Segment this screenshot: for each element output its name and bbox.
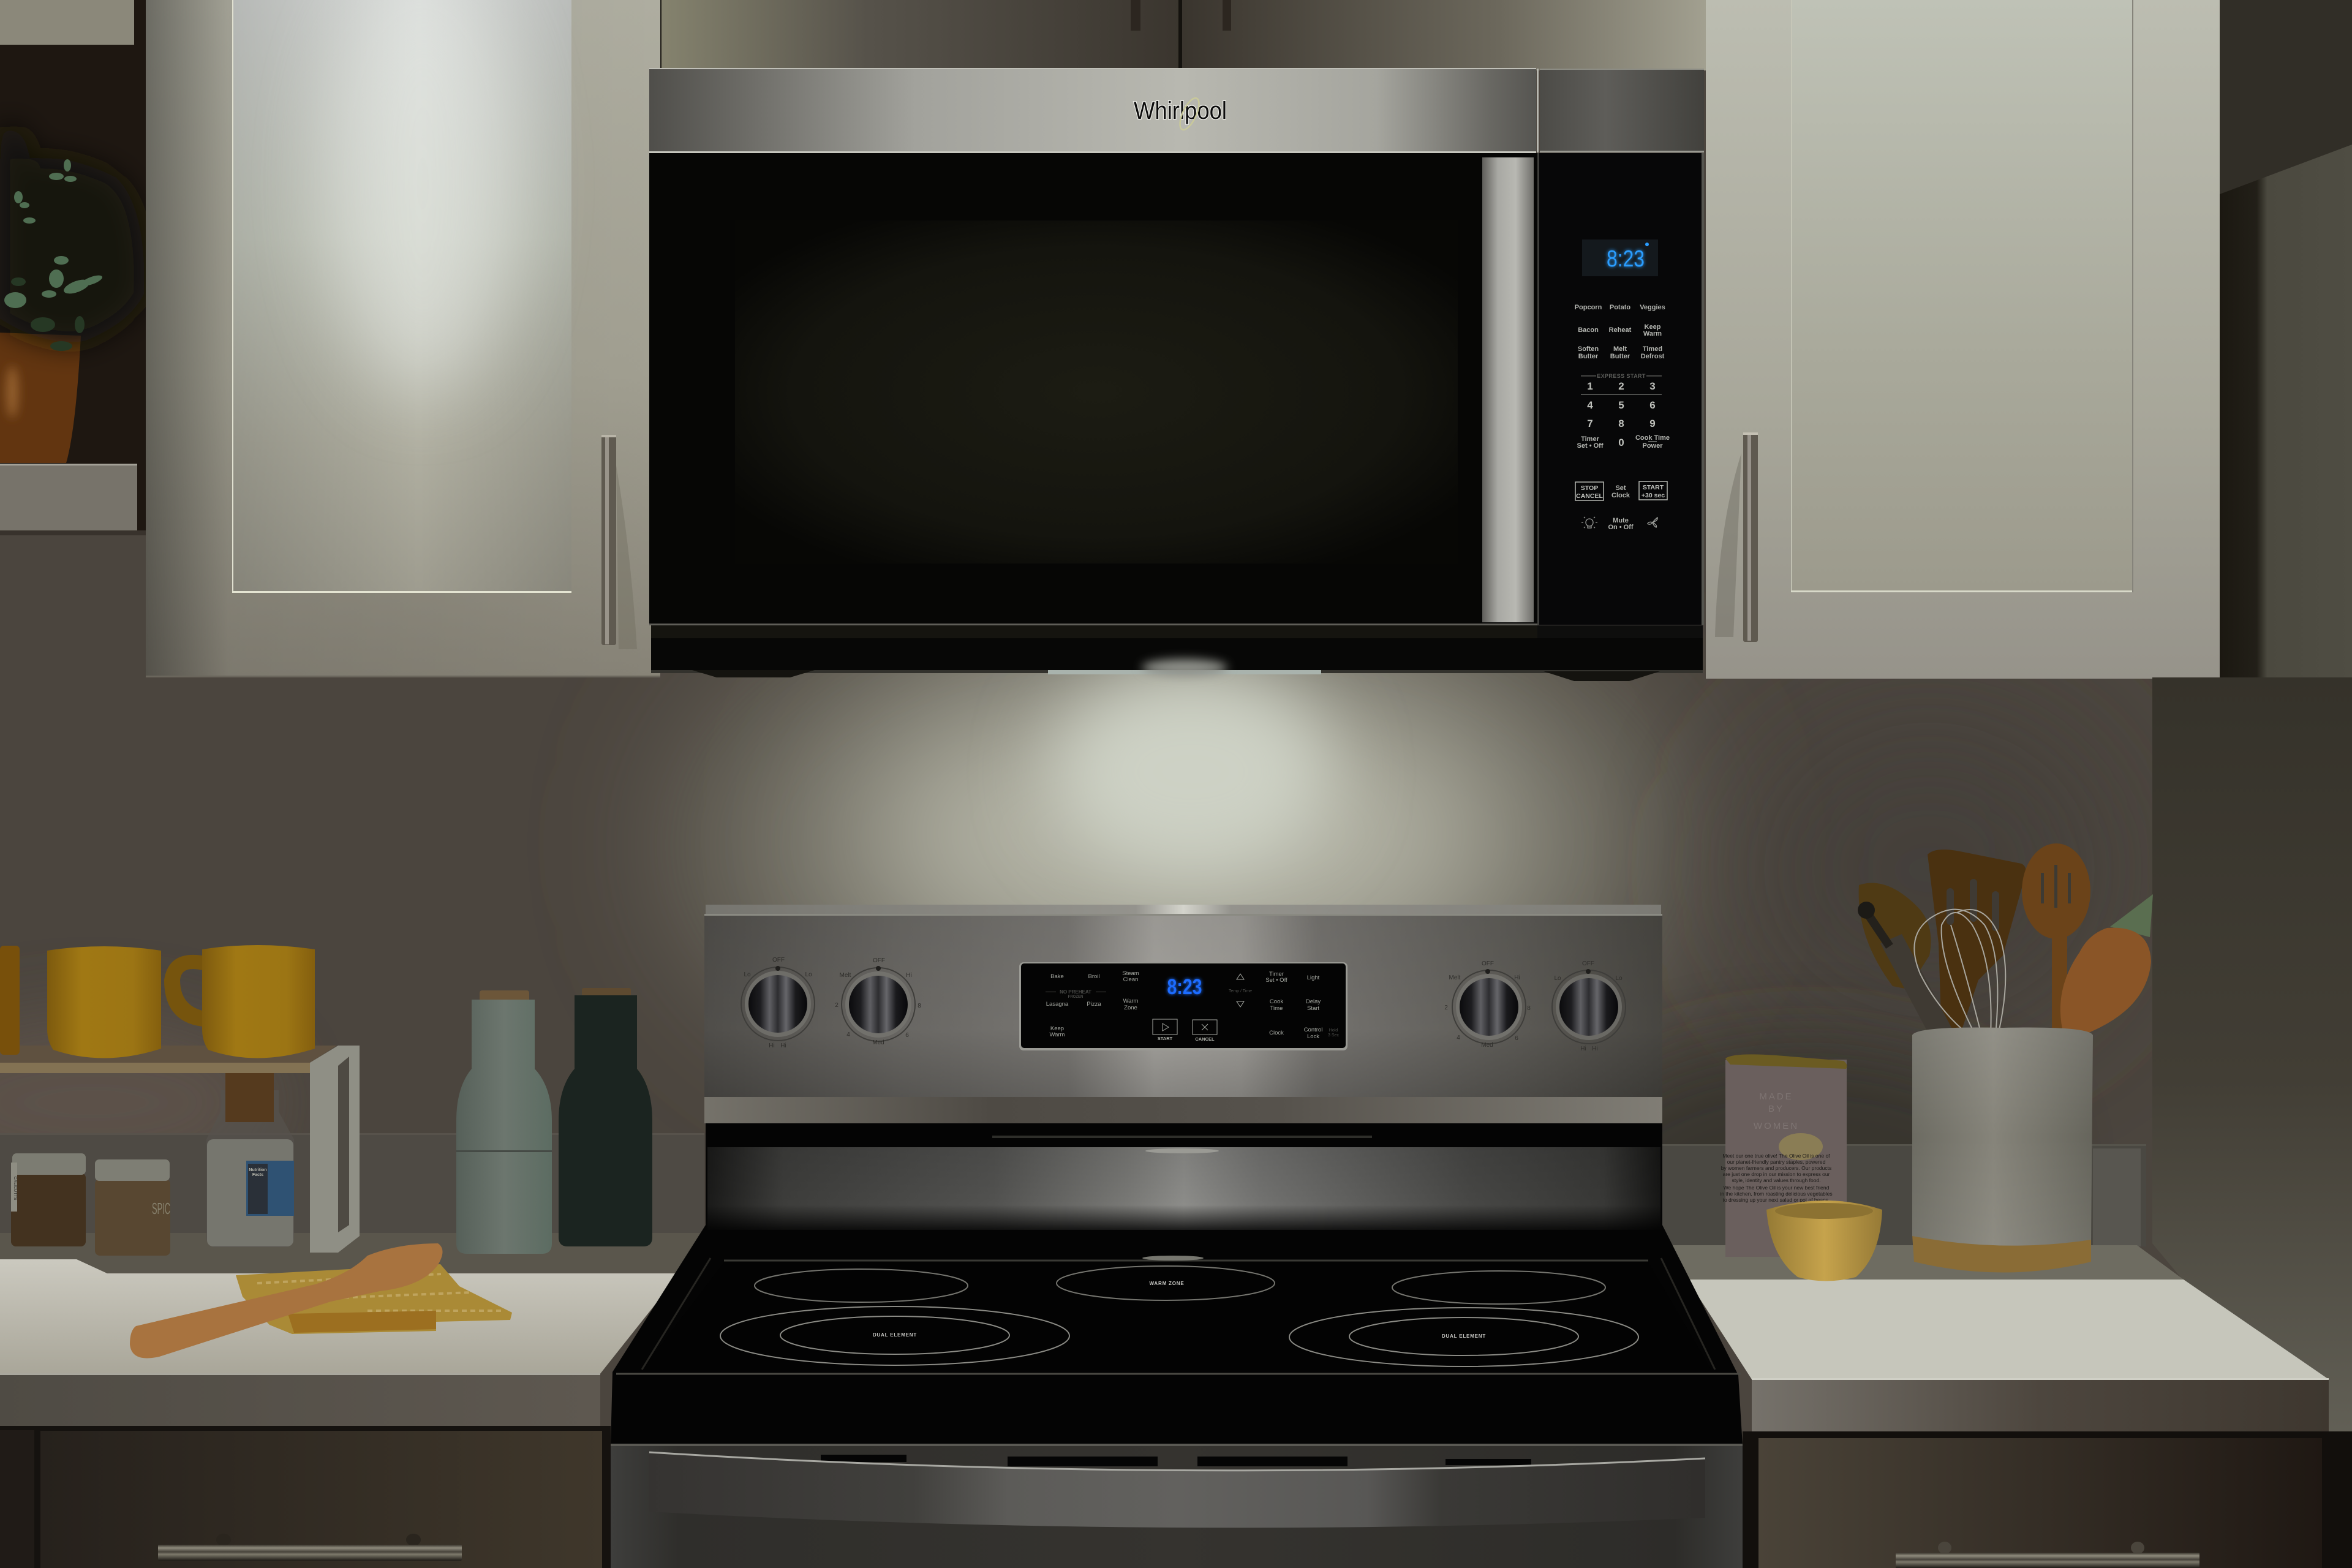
- mug left partial: [0, 946, 20, 1055]
- number keys: 4: [1587, 399, 1593, 411]
- right keys: Lock: [1307, 1033, 1319, 1040]
- left knob: Hi: [780, 1042, 786, 1049]
- slotted spoon: [2022, 843, 2090, 1038]
- right bracket: [1544, 671, 1660, 681]
- cooktop glass: [616, 1256, 1741, 1374]
- third knob: Hi: [1514, 974, 1520, 981]
- mute key: Mute: [1613, 517, 1629, 524]
- right keys: Cook: [1270, 998, 1283, 1005]
- third knob: 8: [1527, 1005, 1531, 1012]
- lit leaves: [4, 159, 104, 308]
- second knob: Hi: [906, 972, 912, 979]
- burner front left: [720, 1306, 1069, 1365]
- third knob: 4: [1457, 1035, 1460, 1041]
- door handle: [1482, 157, 1534, 622]
- number keys: 6: [1649, 399, 1656, 411]
- left knob: [741, 957, 815, 1049]
- left keys: Keep: [1050, 1025, 1064, 1032]
- stop cancel key: CANCEL: [1576, 492, 1603, 500]
- left keys: [1046, 970, 1139, 1038]
- range body and cooktop surround: [611, 1123, 1743, 1446]
- right upper cabinet door: [1706, 0, 2220, 679]
- preset keys: Bacon: [1578, 326, 1599, 334]
- number keys: [1587, 380, 1656, 448]
- mug centre: [47, 946, 161, 1058]
- stop cancel key: [1575, 482, 1604, 500]
- no preheat label: FROZEN: [1068, 995, 1083, 999]
- potted plant: [0, 126, 144, 463]
- door vents: [821, 1455, 1531, 1466]
- second knob: OFF: [873, 957, 885, 964]
- terracotta pot: [0, 333, 81, 463]
- clock display: 8:23: [1607, 246, 1645, 272]
- number keys: 8: [1618, 418, 1624, 429]
- yellow cup: [1766, 1200, 1882, 1281]
- clock display: [1582, 239, 1658, 276]
- large spoon: [2060, 928, 2151, 1036]
- burner back left: [755, 1269, 968, 1302]
- preset keys: Soften: [1578, 345, 1599, 353]
- right keys: Timer: [1269, 971, 1284, 978]
- preset keys: Potato: [1610, 304, 1630, 311]
- left keys: Clean: [1123, 976, 1138, 983]
- timer and cook time keys: Cook Time: [1635, 434, 1670, 442]
- handle shadow: [1715, 453, 1741, 637]
- grinder pale: [456, 990, 552, 1254]
- cabinet handles: [1131, 0, 1140, 31]
- wooden riser shelf: [0, 1046, 337, 1073]
- oven door: [611, 1444, 1743, 1568]
- right keys: Start: [1307, 1005, 1319, 1012]
- left counter props: [0, 945, 652, 1359]
- right keys: Delay: [1306, 998, 1321, 1005]
- right knob: OFF: [1582, 960, 1594, 967]
- preset keys: Melt: [1613, 345, 1627, 353]
- right keys: Control: [1304, 1027, 1322, 1033]
- tin copy: are just one drop in our mission to express our: [1723, 1171, 1830, 1177]
- tin copy: We hope The Olive Oil is your new best friend: [1724, 1185, 1830, 1191]
- right knob: Lo: [1554, 975, 1561, 982]
- second knob: 6: [905, 1032, 909, 1039]
- right keys: [1265, 971, 1322, 1040]
- left counter props: SPIC: [152, 1199, 170, 1218]
- third knob: [1444, 960, 1531, 1049]
- timer and cook time keys: Power: [1642, 442, 1663, 450]
- right keys: Clock: [1269, 1030, 1284, 1036]
- burner front left: DUAL ELEMENT: [873, 1332, 917, 1338]
- timer and cook time keys: [1577, 434, 1670, 450]
- wooden spatula: [1928, 850, 2026, 1035]
- wire whisk: [1914, 910, 2005, 1035]
- tin copy: Meet our one true olive! The Olive Oil is one of: [1722, 1153, 1830, 1159]
- white utensil crock: [1912, 1028, 2093, 1273]
- stainless top band: [649, 68, 1536, 153]
- tin copy: our planet-friendly pantry staples, powered: [1727, 1159, 1826, 1165]
- express start label: EXPRESS START: [1597, 373, 1646, 379]
- control panel: [1537, 153, 1704, 625]
- icon: light bulb: [1581, 517, 1597, 528]
- left upper cabinet door: [146, 0, 660, 677]
- door bottom trim: [649, 624, 1703, 638]
- left knob: Lo: [744, 971, 751, 978]
- electric range: [611, 905, 1743, 1568]
- green spatula tip: [2110, 894, 2153, 937]
- door glass: [649, 153, 1537, 625]
- cabinet handle: [1743, 432, 1758, 642]
- preset keys: Warm: [1643, 330, 1662, 337]
- express start label: [1581, 373, 1662, 394]
- tin seal: [1779, 1133, 1823, 1160]
- second knob: [835, 957, 921, 1046]
- nutrition label: Facts: [252, 1173, 263, 1177]
- second knob: 2: [835, 1002, 839, 1009]
- start button: [1153, 1019, 1177, 1041]
- preset keys: Reheat: [1609, 326, 1632, 334]
- left keys: Broil: [1088, 973, 1100, 980]
- tin copy: by women farmers and producers. Our products: [1721, 1165, 1831, 1171]
- left knob: Lo: [805, 971, 812, 978]
- recessed panel: [1791, 0, 2133, 592]
- backguard: [704, 905, 1662, 1123]
- left keys: Warm: [1050, 1031, 1065, 1038]
- second knob: 8: [918, 1003, 921, 1009]
- left knob: Hi: [769, 1042, 775, 1049]
- cancel button: CANCEL: [1195, 1036, 1215, 1042]
- start key: [1639, 481, 1667, 500]
- third knob: Melt: [1449, 974, 1461, 981]
- nutrition label: Nutrition: [249, 1168, 267, 1172]
- cancel button: [1193, 1020, 1217, 1042]
- left keys: Lasagna: [1046, 1001, 1069, 1008]
- olive oil tin: BY: [1768, 1104, 1784, 1114]
- spice jar one: [11, 1153, 86, 1246]
- right knob: Hi: [1592, 1046, 1598, 1052]
- temp time arrows: [1229, 974, 1252, 1007]
- clock display: 8:23: [1167, 975, 1202, 999]
- second knob: Melt: [840, 972, 851, 979]
- timer and cook time keys: Set • Off: [1577, 442, 1604, 450]
- olive oil tin: MADE: [1759, 1091, 1793, 1102]
- number keys: 7: [1587, 418, 1593, 429]
- temp time arrows: Temp / Time: [1229, 989, 1252, 993]
- microwave underside: [651, 637, 1703, 681]
- brand logo: [1134, 96, 1227, 132]
- upper shelf: [0, 0, 134, 45]
- hold hint: 3 Sec: [1328, 1033, 1339, 1038]
- no preheat label: [1046, 989, 1106, 999]
- number keys: 2: [1618, 380, 1624, 392]
- grinder dark: [559, 988, 652, 1246]
- recessed panel: [232, 0, 571, 593]
- microwave: [649, 68, 1704, 681]
- glossy splash reflection: [707, 1136, 1660, 1230]
- preset keys: Keep: [1645, 323, 1661, 331]
- burner back right: [1392, 1271, 1605, 1304]
- set clock key: Clock: [1611, 492, 1630, 499]
- trim band: [704, 1097, 1662, 1123]
- fridge side upper right: [2220, 0, 2352, 680]
- start key: START: [1643, 484, 1664, 491]
- mute key: On • Off: [1608, 524, 1634, 531]
- number keys: 9: [1649, 418, 1656, 429]
- drawer front: [40, 1431, 602, 1568]
- tin copy: in the kitchen, from roasting delicious vegetables: [1720, 1191, 1833, 1197]
- left bracket: [692, 670, 815, 677]
- preset keys: Popcorn: [1575, 304, 1602, 311]
- olive oil tin: [1720, 1054, 1847, 1257]
- drawer pull: [1896, 1542, 2199, 1568]
- control display panel: [1019, 962, 1348, 1050]
- burner front right: DUAL ELEMENT: [1442, 1333, 1486, 1339]
- drawer front: [1758, 1438, 2322, 1568]
- tin copy: [1720, 1153, 1833, 1203]
- second knob: Med: [872, 1039, 884, 1046]
- right keys: Set • Off: [1265, 977, 1287, 984]
- right knob: Lo: [1615, 975, 1623, 982]
- lower cabinets left: [0, 1426, 611, 1568]
- corner wall panel lower right: [2152, 677, 2352, 1482]
- number keys: 5: [1618, 399, 1624, 411]
- number keys: 0: [1618, 437, 1624, 448]
- hold hint: Hold: [1329, 1028, 1338, 1033]
- cabinet handle: [601, 435, 637, 649]
- yellow towel: [236, 1264, 512, 1334]
- under-cabinet light pool on the backsplash: [0, 582, 2113, 1286]
- stop cancel key: STOP: [1581, 484, 1598, 492]
- left keys: Bake: [1050, 973, 1064, 980]
- third knob: OFF: [1482, 960, 1494, 967]
- left keys: Warm: [1123, 998, 1139, 1005]
- icon: fan: [1648, 518, 1657, 527]
- brand logo: Whirlpool: [1134, 97, 1227, 124]
- mug right: [164, 945, 315, 1058]
- preset keys: Veggies: [1640, 304, 1665, 311]
- left keys: Zone: [1124, 1005, 1137, 1011]
- right knob: Hi: [1580, 1046, 1586, 1052]
- number keys: 1: [1587, 380, 1593, 392]
- metal tongs: [1858, 902, 1954, 1035]
- tin copy: style, identity and values through food.: [1732, 1177, 1821, 1183]
- start button: START: [1158, 1036, 1173, 1041]
- mute key: [1608, 517, 1634, 531]
- middle upper cabinet above microwave: [657, 0, 1710, 70]
- drawer pull: [158, 1534, 462, 1561]
- hold hint: [1328, 1028, 1339, 1038]
- dark foliage: [0, 126, 144, 343]
- tin copy: to dressing up your next salad or pot of beans.: [1723, 1197, 1830, 1203]
- left knob: OFF: [772, 957, 785, 963]
- third knob: Med: [1481, 1042, 1493, 1049]
- right knob: [1552, 960, 1626, 1052]
- number keys: 3: [1649, 380, 1656, 392]
- burner back centre: [1057, 1266, 1275, 1300]
- backsplash tile ledge: [0, 1133, 2146, 1246]
- olive oil tin: WOMEN: [1754, 1121, 1799, 1131]
- wooden spoon: [130, 1243, 442, 1359]
- nutrition label: [246, 1161, 294, 1216]
- salt bottle: [206, 1073, 294, 1247]
- countertop right: [1662, 1245, 2329, 1431]
- left keys: Steam: [1122, 970, 1139, 977]
- burner back centre: WARM ZONE: [1150, 1281, 1184, 1286]
- preset keys: Defrost: [1641, 353, 1665, 360]
- right keys: Light: [1307, 974, 1320, 981]
- riser bracket: [310, 1046, 360, 1253]
- left keys: Pizza: [1087, 1001, 1101, 1008]
- burner front right: [1289, 1308, 1638, 1366]
- set clock key: [1611, 484, 1630, 499]
- no preheat label: NO PREHEAT: [1060, 989, 1091, 995]
- tall spoon left: [1859, 883, 1931, 989]
- second knob: 4: [846, 1031, 850, 1038]
- timer and cook time keys: Timer: [1581, 435, 1600, 443]
- third knob: 6: [1515, 1035, 1518, 1042]
- start key: +30 sec: [1642, 492, 1665, 499]
- spice jar two: [95, 1159, 170, 1256]
- preset keys: Timed: [1643, 345, 1662, 353]
- countertop left: [0, 1233, 710, 1426]
- preset keys: Butter: [1578, 353, 1599, 360]
- preset keys: [1575, 304, 1665, 360]
- oven door handle: [649, 1452, 1705, 1528]
- stainless right band: [1537, 69, 1704, 153]
- lower shelf: [0, 464, 137, 530]
- spice jar one: CALICUTTS: [13, 1177, 17, 1200]
- left open shelving niche: [0, 0, 147, 535]
- right keys: Time: [1270, 1005, 1283, 1012]
- lower cabinets right: [1743, 1431, 2352, 1568]
- third knob: 2: [1444, 1005, 1448, 1011]
- preset keys: Butter: [1610, 353, 1630, 360]
- set clock key: Set: [1615, 484, 1626, 492]
- right counter props: [1720, 843, 2153, 1281]
